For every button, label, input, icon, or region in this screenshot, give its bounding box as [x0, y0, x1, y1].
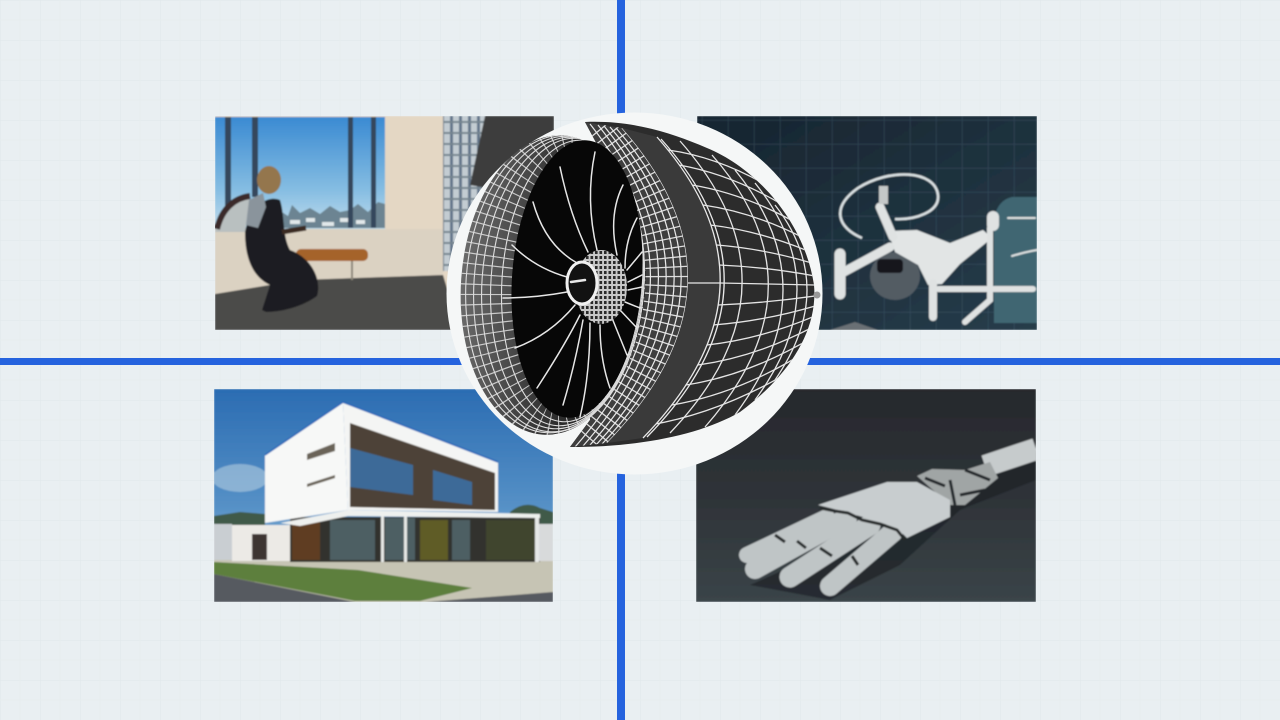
drone camera	[870, 252, 920, 300]
rotor ring	[840, 174, 938, 238]
person head	[257, 166, 281, 194]
fan blades	[503, 152, 642, 417]
left annex	[232, 525, 290, 561]
brown facade	[350, 423, 495, 510]
ground concrete	[214, 560, 553, 602]
floor	[215, 275, 460, 330]
cowl section	[555, 118, 705, 453]
hand shadow	[750, 450, 1036, 600]
person arm	[282, 228, 306, 232]
fingers	[747, 517, 893, 586]
dark figure behind engine	[470, 116, 554, 188]
person shoulder	[246, 193, 266, 228]
building right face	[343, 403, 498, 512]
wheel sector	[215, 196, 250, 232]
lower wall	[215, 229, 443, 294]
icon: jet engine wireframe	[451, 118, 820, 453]
white circle behind engine	[446, 112, 822, 474]
roof edge	[265, 402, 498, 462]
knuckle joints	[775, 508, 905, 565]
wood cladding	[292, 522, 320, 560]
inner wall	[451, 129, 655, 441]
forearm	[985, 449, 1036, 466]
annex door	[252, 534, 267, 560]
columns	[381, 515, 539, 562]
nose tip	[571, 280, 585, 282]
inner wall grid	[456, 129, 656, 439]
green wall	[420, 520, 448, 560]
panel: drone wireframe	[697, 116, 1037, 330]
fan hub	[575, 250, 627, 324]
drone arms	[840, 207, 1037, 322]
camera lens	[877, 259, 903, 273]
palm	[818, 482, 950, 538]
lawn	[214, 562, 472, 601]
panel: modern building	[212, 389, 553, 602]
cowl ticks	[592, 124, 668, 447]
windows	[350, 448, 472, 505]
cloud	[212, 464, 268, 492]
glazing	[330, 518, 470, 560]
far left building	[214, 524, 232, 560]
band edge lines	[643, 137, 724, 438]
wrist dark joints	[925, 470, 990, 505]
hub nose	[567, 262, 597, 304]
right side annex	[539, 524, 553, 561]
cowl rings	[575, 124, 688, 447]
window mullions	[225, 117, 376, 228]
window sky	[215, 117, 385, 229]
distant trees	[214, 504, 553, 526]
green wall right	[486, 520, 536, 560]
bench	[296, 249, 368, 261]
tree highlights	[290, 220, 365, 224]
bench leg	[351, 261, 353, 280]
right rotor panel	[994, 197, 1037, 323]
engine body	[570, 122, 814, 447]
background mesh	[697, 116, 1037, 330]
person body	[245, 199, 318, 312]
skyline trees	[280, 202, 385, 228]
wheel arc	[217, 196, 250, 229]
plaid building	[442, 116, 486, 272]
canopy	[280, 510, 540, 526]
floor blob	[830, 322, 878, 330]
rotor hub	[879, 186, 888, 204]
ground floor	[290, 517, 540, 562]
panel: robotic hand	[696, 389, 1036, 602]
dark band	[607, 128, 720, 443]
dome grid	[650, 141, 815, 433]
drone body	[888, 230, 992, 285]
panel: person seated at window	[215, 116, 554, 330]
wrist mechanism	[917, 462, 998, 505]
road	[214, 574, 553, 602]
building left face	[265, 403, 348, 523]
fan disc	[502, 136, 652, 422]
tip fitting	[814, 292, 820, 298]
wall slots	[307, 443, 335, 487]
